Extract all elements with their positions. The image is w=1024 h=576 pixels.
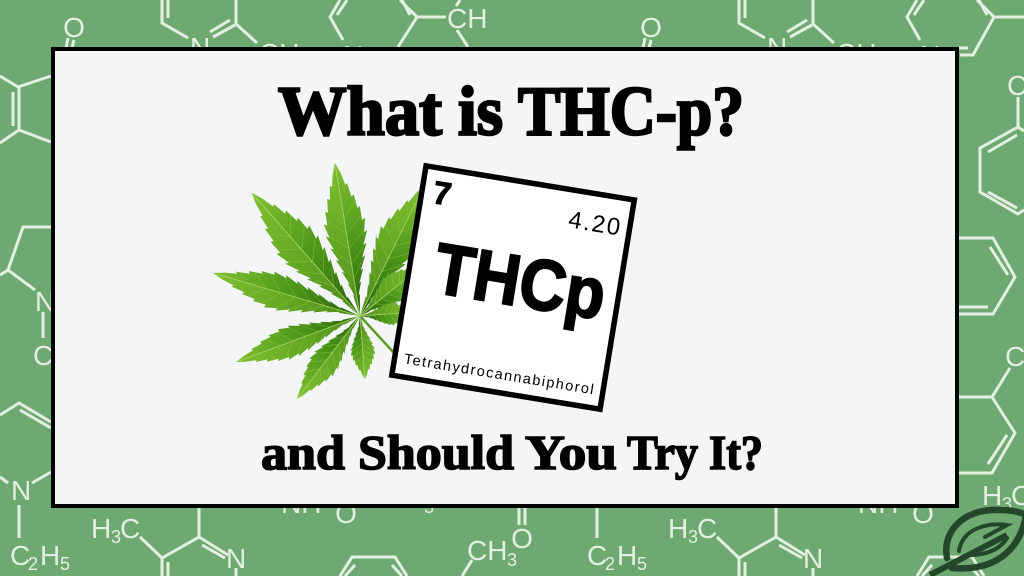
molecule pattern: left tile: 3 — [424, 497, 434, 517]
main panel — [53, 49, 957, 506]
molecule pattern: left tile: N — [190, 32, 210, 63]
molecule pattern: left tile: N — [11, 475, 31, 506]
title: What — [278, 74, 442, 150]
molecule pattern: left tile: C — [120, 513, 140, 544]
molecule pattern: left tile: 5 — [60, 554, 70, 574]
molecule pattern: right tile: 2 — [605, 554, 615, 574]
molecule pattern: right tile: 3 — [688, 527, 698, 547]
molecule pattern: right tile: NH — [858, 488, 898, 519]
title — [278, 74, 744, 150]
molecule pattern: right tile: 5 — [637, 554, 647, 574]
molecule pattern: left tile: C — [10, 540, 30, 571]
subtitle: You — [525, 425, 617, 480]
subtitle — [261, 425, 763, 480]
molecule pattern: left tile: 3 — [507, 550, 517, 570]
molecule pattern: left tile: N — [35, 286, 55, 317]
element symbol: THCp — [429, 229, 611, 335]
molecule pattern: right tile: H — [982, 480, 1002, 511]
molecule pattern: right tile: C — [587, 540, 607, 571]
molecule pattern: left tile: 3 — [111, 527, 121, 547]
molecule pattern: left tile: H — [91, 513, 111, 544]
molecule pattern: left tile: N — [226, 543, 246, 574]
molecule pattern: right tile: CH — [836, 38, 876, 69]
molecule pattern: left tile: O — [335, 498, 357, 529]
molecule pattern: left tile: 2 — [28, 554, 38, 574]
molecule pattern: left tile: CH — [447, 3, 487, 34]
molecule pattern: left tile: N — [343, 40, 363, 71]
molecule pattern: right tile: N — [803, 543, 823, 574]
molecule pattern: left tile: NH — [281, 488, 321, 519]
molecule pattern: right tile — [587, 0, 1024, 576]
molecule pattern: right tile: C — [697, 513, 717, 544]
atomic number: 7 — [431, 174, 454, 213]
subtitle: Should — [358, 425, 514, 480]
periodic table card — [392, 166, 634, 409]
molecule pattern: left tile: CH — [259, 38, 299, 69]
molecule pattern: right tile: O — [640, 12, 662, 43]
molecule pattern: right tile: N — [767, 32, 787, 63]
molecule pattern: right tile: O — [912, 498, 934, 529]
molecule pattern: left tile: H — [40, 540, 60, 571]
molecule pattern: right tile: N — [920, 40, 940, 71]
subtitle: Try — [627, 425, 698, 480]
atomic mass: 4.20 — [567, 206, 622, 241]
molecule pattern: left tile: CH — [467, 535, 507, 566]
molecule pattern: left tile: O — [511, 523, 533, 554]
molecule pattern: left tile: C — [33, 340, 53, 371]
title: is — [458, 74, 503, 150]
subtitle: and — [261, 425, 345, 480]
icon: logo leaf — [930, 510, 1024, 575]
molecule pattern: right tile: H — [617, 540, 637, 571]
molecule pattern: right tile: H — [668, 513, 688, 544]
molecule pattern: left tile: O — [63, 12, 85, 43]
molecule pattern: right tile: 3 — [1002, 494, 1012, 514]
subtitle: It? — [709, 425, 763, 480]
title: THC-p? — [518, 74, 744, 150]
element name: Tetrahydrocannabiphorol — [403, 351, 595, 398]
molecule pattern: left tile — [0, 0, 533, 576]
icon: cannabis leaf — [208, 160, 443, 408]
